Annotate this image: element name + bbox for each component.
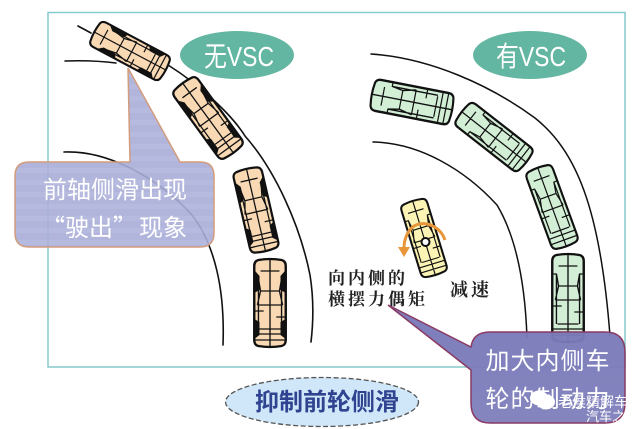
right road edges — [371, 54, 610, 338]
watermark — [530, 390, 638, 424]
callout: front axle sideslip — [15, 68, 214, 247]
diagram frame — [48, 12, 625, 367]
car without VSC: second — [171, 74, 245, 162]
label: yaw moment toward inside: 向内侧的 — [328, 268, 408, 288]
callout: front axle sideslip: 前轴侧滑出现 — [43, 177, 187, 204]
left road edges — [64, 26, 313, 345]
yellow car with yaw moment — [398, 197, 448, 279]
badge: with VSC — [473, 31, 587, 79]
car without VSC: third — [232, 166, 280, 254]
summary label: suppress front wheel slip: 抑制前轮侧滑 — [255, 389, 399, 416]
car without VSC: bottom — [254, 259, 286, 347]
watermark: 老侯精解车 — [558, 394, 628, 410]
car with VSC: third — [525, 163, 579, 251]
callout: front axle sideslip: “ — [41, 208, 65, 243]
car with VSC: bottom — [552, 254, 584, 342]
callout: increase inner wheel braking: 加大内侧车 — [486, 348, 610, 375]
callout: front axle sideslip: 现象 — [139, 208, 187, 243]
car with VSC: second — [453, 100, 535, 174]
callout: increase inner wheel braking: 轮的制动力 — [486, 386, 610, 413]
badge: without VSC: 无VSC — [204, 41, 274, 72]
label: deceleration: 减速 — [450, 279, 492, 300]
callout: front axle sideslip: ” — [113, 208, 137, 243]
callout: increase inner wheel braking — [388, 305, 625, 423]
car with VSC: top — [369, 79, 455, 125]
watermark: 汽车之家 — [586, 409, 638, 424]
badge: with VSC: 有VSC — [496, 41, 566, 72]
label: yaw moment toward inside: 横摆力偶矩 — [328, 289, 428, 309]
callout: front axle sideslip: 驶出 — [65, 208, 113, 243]
car without VSC: top, sliding out — [88, 20, 172, 82]
badge: without VSC — [180, 31, 294, 79]
summary label: suppress front wheel slip — [226, 378, 418, 426]
